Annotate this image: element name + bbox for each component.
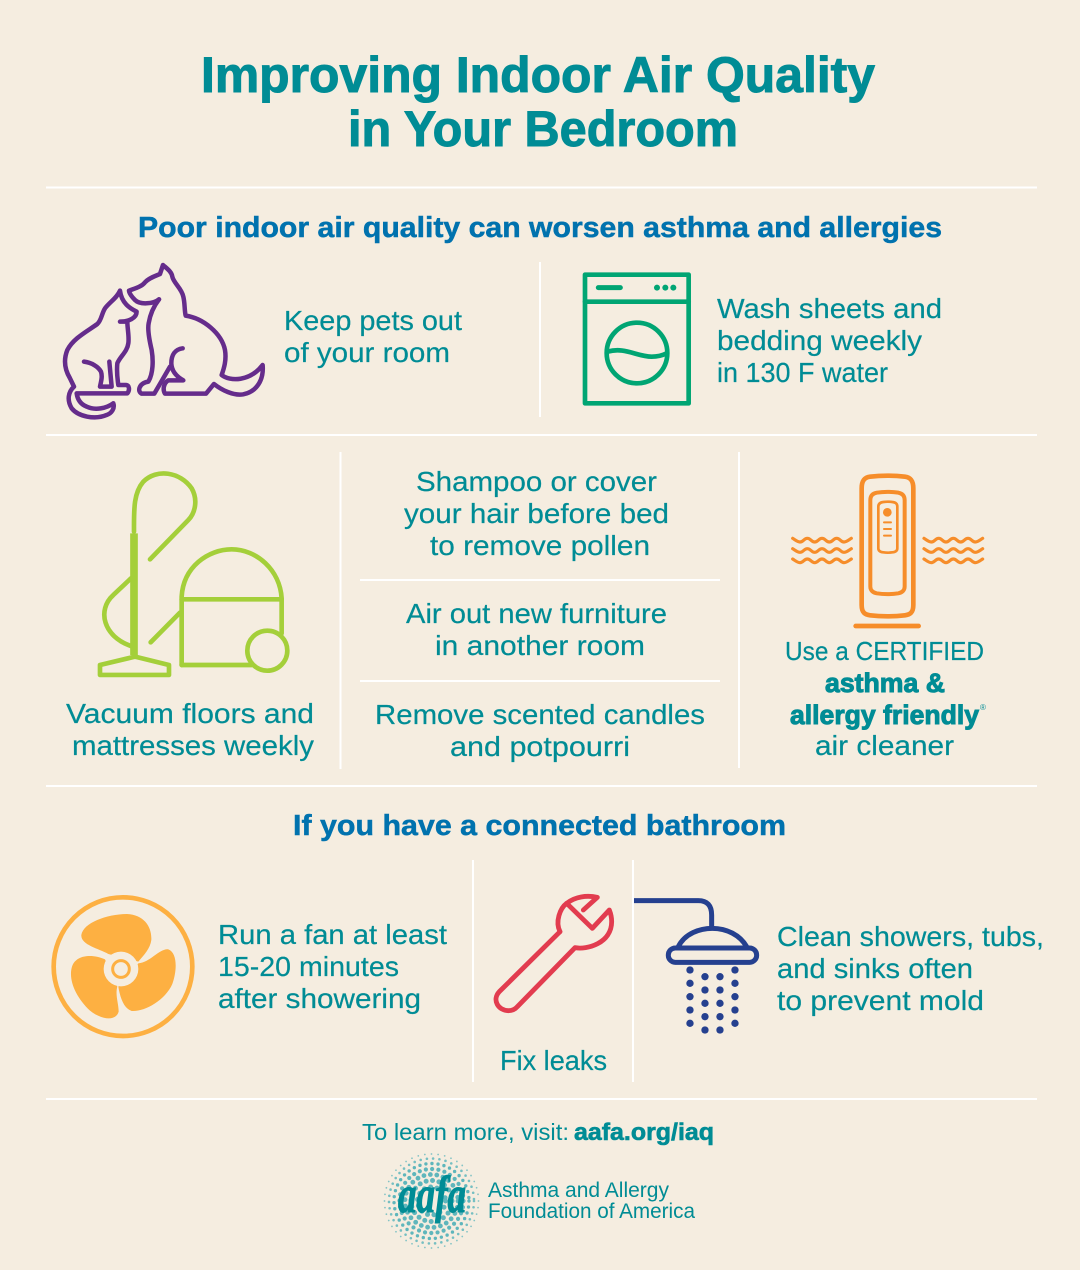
text: air out new furniture: Air out new furniture (406, 598, 667, 629)
text: keep pets out: of your room (284, 337, 450, 368)
logo: aafa (384, 1154, 695, 1248)
text: clean showers: Clean showers, tubs, (777, 921, 1044, 952)
text: air out new furniture (406, 598, 667, 661)
text: learn more link (362, 1119, 714, 1146)
logo: aafa: Asthma and Allergy (488, 1179, 669, 1202)
text: use a certified air cleaner: asthma & (825, 668, 945, 698)
text: run a fan: Run a fan at least (218, 919, 447, 950)
text: wash sheets: Wash sheets and (717, 293, 942, 324)
text: run a fan: 15-20 minutes (218, 951, 399, 982)
text: run a fan (218, 919, 447, 1014)
icon: air purifier (793, 476, 983, 626)
icon: washing machine (585, 275, 689, 403)
text: wash sheets: bedding weekly (717, 325, 922, 356)
text: learn more link: To learn more, visit: (362, 1119, 569, 1145)
title: in Your Bedroom (348, 101, 738, 157)
title (201, 47, 875, 157)
text: run a fan: after showering (218, 983, 421, 1014)
text: use a certified air cleaner: air cleaner (815, 730, 954, 761)
text: remove scented candles (375, 699, 705, 762)
text: use a certified air cleaner: allergy friendly (790, 700, 979, 730)
text: clean showers (777, 921, 1044, 1016)
text: remove scented candles: and potpourri (450, 731, 630, 762)
text: wash sheets: in 130 F water (717, 357, 888, 388)
text: remove scented candles: Remove scented candles (375, 699, 705, 730)
text: use a certified air cleaner (785, 636, 986, 761)
text: shampoo or cover hair: your hair before bed (404, 498, 669, 529)
logo: aafa: Foundation of America (488, 1200, 695, 1223)
text: clean showers: to prevent mold (777, 985, 984, 1016)
text: clean showers: and sinks often (777, 953, 973, 984)
icon: cat and dog (65, 265, 263, 417)
text: shampoo or cover hair: to remove pollen (430, 530, 650, 561)
heading: connected bathroom: If you have a connected bathroom (293, 810, 786, 842)
icon: fan (54, 897, 192, 1036)
text: shampoo or cover hair (404, 466, 669, 561)
icon: shower (634, 901, 757, 1034)
text: use a certified air cleaner: Use a CERTIFIED (785, 636, 984, 666)
text: vacuum floors: mattresses weekly (72, 730, 314, 761)
logo: aafa: aafa (398, 1167, 466, 1224)
text: air out new furniture: in another room (435, 630, 645, 661)
text: keep pets out: Keep pets out (284, 305, 462, 336)
text: vacuum floors: Vacuum floors and (66, 698, 314, 729)
icon: wrench (496, 896, 612, 1011)
text: keep pets out (284, 305, 462, 368)
heading: poor indoor air quality: Poor indoor air quality can worsen asthma and allergies (138, 212, 942, 244)
text: use a certified air cleaner: ® (980, 703, 986, 712)
text: learn more link: aafa.org/iaq (574, 1119, 714, 1146)
icon: vacuum cleaner (100, 473, 287, 675)
text: shampoo or cover hair: Shampoo or cover (416, 466, 657, 497)
text: wash sheets (717, 293, 942, 388)
text: fix leaks: Fix leaks (500, 1045, 607, 1076)
text: vacuum floors (66, 698, 314, 761)
title: Improving Indoor Air Quality (201, 47, 875, 103)
